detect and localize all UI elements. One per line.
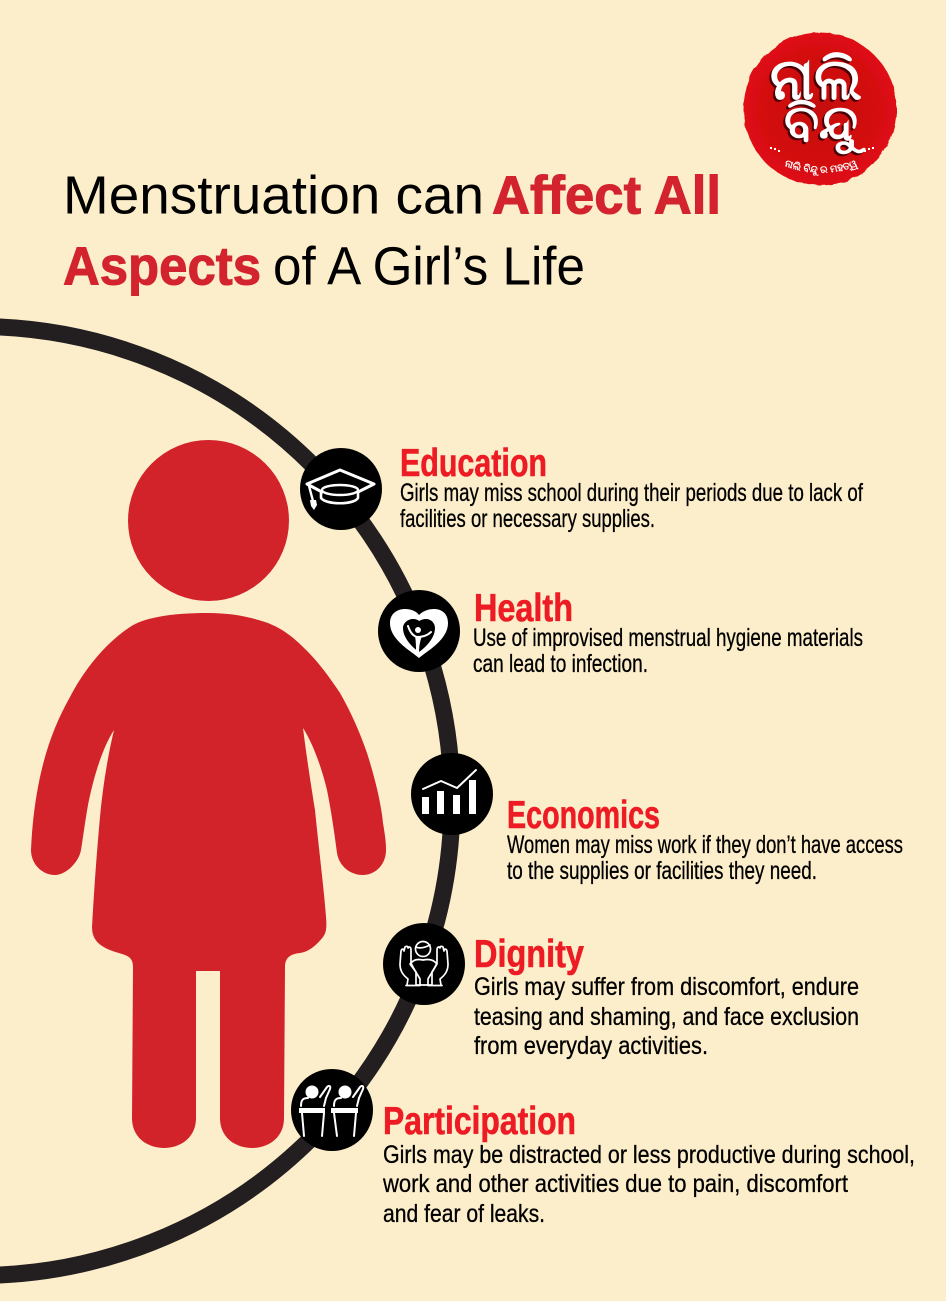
text: Health: Health (474, 587, 573, 630)
text: Health (473, 587, 863, 678)
title: of A Girl’s Life (273, 236, 585, 296)
icon: economics growth chart (411, 753, 493, 835)
logo: Nali Bindu red seal: ନାଲି ବିନ୍ଦୁ ର ମହତ୍ୱ (785, 160, 858, 176)
title: Menstruation can (63, 166, 484, 226)
figure body (31, 613, 386, 1148)
logo: Nali Bindu red seal (743, 32, 897, 186)
text: Participation: work and other activities due to pain, discomfort (382, 1170, 848, 1198)
logo: Nali Bindu red seal: ନାଲି (770, 47, 862, 112)
text: Economics: Economics (507, 794, 660, 837)
text: Education: facilities or necessary supplies. (400, 505, 655, 533)
text: Participation: and fear of leaks. (383, 1200, 545, 1228)
arc timeline (0, 326, 452, 1276)
text: Dignity: teasing and shaming, and face exclusion (474, 1003, 859, 1031)
icon: dignity person in hands (383, 923, 465, 1005)
logo: Nali Bindu red seal: ବିନ୍ଦୁ (784, 95, 866, 155)
icon: education graduation cap (300, 448, 382, 530)
icon: participation raised hands at podiums (291, 1069, 373, 1151)
title: Affect All (492, 166, 721, 226)
text: Dignity: Girls may suffer from discomfort, endure (474, 973, 859, 1001)
text: Dignity (474, 933, 859, 1060)
text: Education (400, 442, 863, 533)
text: Dignity: Dignity (474, 933, 584, 976)
icon: health heart (378, 590, 460, 672)
text: Education: Education (400, 442, 547, 485)
text: Dignity: from everyday activities. (474, 1032, 708, 1060)
title (63, 166, 721, 296)
girl figure (31, 440, 386, 1148)
text: Health: can lead to infection. (473, 650, 648, 678)
title: Aspects (63, 236, 261, 296)
figure head (128, 440, 289, 601)
text: Economics: to the supplies or facilities they need. (507, 857, 817, 885)
text: Participation (382, 1100, 915, 1228)
text: Economics (507, 794, 903, 885)
text: Participation: Participation (383, 1100, 576, 1143)
